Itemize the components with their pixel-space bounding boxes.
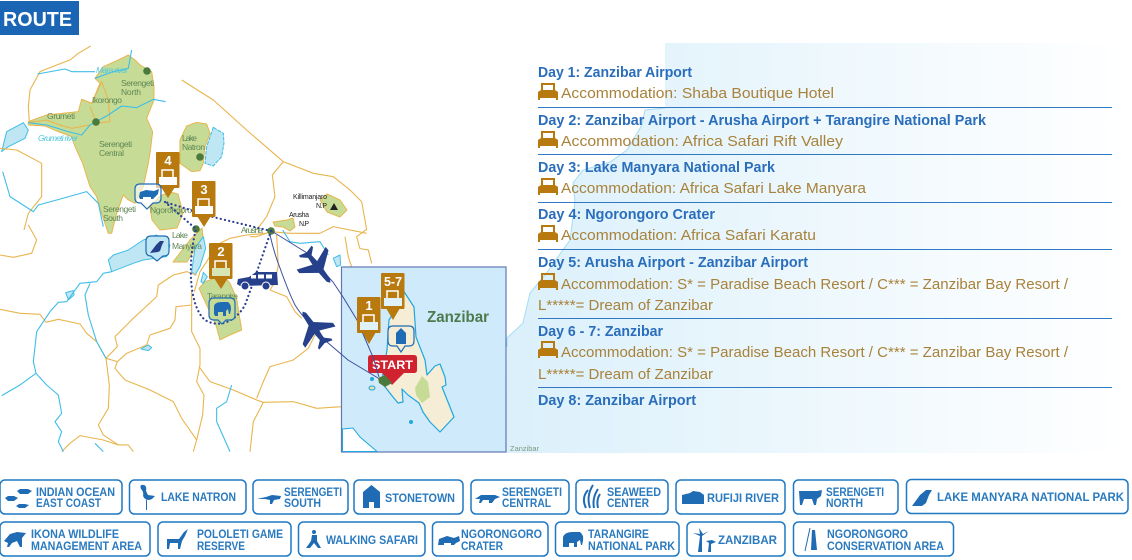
legend: Lake Natron xyxy=(130,480,246,514)
legend: Tarangire: TARANGIRE xyxy=(588,529,649,541)
plane 1 xyxy=(291,239,345,294)
map labels: Mara river xyxy=(96,65,129,75)
day 3: Accommodation: Africa Safari Lake Manyara xyxy=(561,181,867,197)
day 1 xyxy=(538,65,834,102)
callout: START xyxy=(368,355,417,385)
legend: Seaweed Center: CENTER xyxy=(607,498,650,510)
legend: Pololeti xyxy=(158,522,291,556)
pin: day 1 xyxy=(357,297,380,344)
map labels: Serengeti xyxy=(121,78,154,88)
location dots xyxy=(92,67,275,235)
callout: START: START xyxy=(372,358,414,372)
coastline xyxy=(507,108,665,347)
pin: day 2: 2 xyxy=(217,244,225,259)
legend: Indian Ocean East Coast xyxy=(0,480,122,514)
day 5: Accommodation: S* = Paradise Beach Resort / C*** = Zanzibar Bay Resort / xyxy=(561,277,1069,293)
Zanzibar Town xyxy=(378,375,392,387)
callout: elephant xyxy=(209,298,235,324)
legend: Stonetown xyxy=(354,480,463,514)
itinerary xyxy=(538,65,1069,409)
legend: Ngorongoro Crater: CRATER xyxy=(461,541,504,553)
legend: Ngorongoro Crater xyxy=(432,522,548,556)
day 6-7 xyxy=(538,324,1069,383)
title: ROUTE xyxy=(3,9,72,31)
dotted driving route xyxy=(165,202,271,324)
map labels: Central xyxy=(99,148,124,158)
pin: days 5-7: 5-7 xyxy=(384,275,402,289)
legend: Pololeti: POLOLETI GAME xyxy=(197,529,283,541)
day 2: Day 2: Zanzibar Airport - Arusha Airport + Tarangire National Park xyxy=(538,113,987,129)
legend: Serengeti South xyxy=(253,480,348,514)
forest area xyxy=(415,376,430,403)
pin: day 1: 1 xyxy=(365,298,373,313)
day 2 xyxy=(538,113,987,150)
pin: day 3: 3 xyxy=(200,182,208,197)
legend: Lake Manyara National Park: LAKE MANYARA NATIONAL PARK xyxy=(937,492,1125,504)
legend: Serengeti North: SERENGETI xyxy=(826,487,884,499)
flight routes xyxy=(270,231,379,378)
icon: safari jeep xyxy=(237,272,278,290)
title xyxy=(0,1,79,35)
map labels: Lake xyxy=(172,230,188,240)
legend: Serengeti Central: SERENGETI xyxy=(502,487,562,499)
map labels: Ikorongo xyxy=(92,95,122,105)
map: northern Tanzania: Killimanjaro xyxy=(293,194,327,201)
pin: day 3 xyxy=(192,181,216,227)
map: northern Tanzania: N.P xyxy=(316,203,327,210)
legend: Lake Natron: LAKE NATRON xyxy=(161,492,236,504)
map labels: Grumeti river xyxy=(38,133,79,143)
legend: Ikona: IKONA WILDLIFE xyxy=(31,529,119,541)
mainland corner in inset xyxy=(342,428,377,452)
legend: Pololeti: RESERVE xyxy=(197,541,245,553)
legend: Walking Safari: WALKING SAFARI xyxy=(326,535,418,547)
day 6-7: Accommodation: S* = Paradise Beach Resort / C*** = Zanzibar Bay Resort / xyxy=(561,345,1069,361)
map labels: Ngorongoro xyxy=(150,205,192,215)
legend: Indian Ocean East Coast: INDIAN OCEAN xyxy=(36,487,115,499)
legend: Serengeti North xyxy=(794,480,898,514)
map labels: Manyara xyxy=(172,241,202,251)
roads xyxy=(0,46,372,267)
map labels: Tarangire xyxy=(207,291,238,301)
day 8: Day 8: Zanzibar Airport xyxy=(538,393,696,409)
callout: stonetown xyxy=(388,326,414,352)
map labels: Arusha xyxy=(241,225,263,235)
inset label: Zanzibar xyxy=(427,309,489,326)
legend: Zanzibar xyxy=(687,522,785,556)
legend: Ngorongoro Conservation Area xyxy=(794,522,954,556)
day 3 xyxy=(538,160,867,197)
day 6-7: Day 6 - 7: Zanzibar xyxy=(538,324,663,340)
map: northern Tanzania: Arusha xyxy=(289,212,309,219)
legend: Ngorongoro Conservation Area: CONSERVATION AREA xyxy=(827,541,944,553)
legend: Ikona: MANAGEMENT AREA xyxy=(31,541,142,553)
map: northern Tanzania: N.P xyxy=(299,221,309,228)
lakes xyxy=(2,123,341,351)
legend: Serengeti North: NORTH xyxy=(826,498,863,510)
legend: Tarangire: NATIONAL PARK xyxy=(588,541,676,553)
day 3: Day 3: Lake Manyara National Park xyxy=(538,160,776,176)
day 1: Day 1: Zanzibar Airport xyxy=(538,65,692,81)
legend: Tarangire xyxy=(556,522,679,556)
legend: Ikona xyxy=(0,522,150,556)
legend: Ngorongoro Conservation Area: NGORONGORO xyxy=(827,529,908,541)
day 4: Accommodation: Africa Safari Karatu xyxy=(561,228,816,244)
legend: Lake Manyara National Park xyxy=(906,480,1128,514)
legend: Walking Safari xyxy=(298,522,425,556)
islets xyxy=(369,378,412,424)
small Zanzibar label: Zanzibar xyxy=(510,444,540,453)
legend: Serengeti Central xyxy=(471,480,569,514)
day 5: Day 5: Arusha Airport - Zanzibar Airport xyxy=(538,255,808,271)
pin: day 4 xyxy=(156,152,180,198)
plane 2 xyxy=(287,301,341,356)
legend: Serengeti South: SOUTH xyxy=(284,498,321,510)
map labels xyxy=(38,65,263,301)
legend: Rufiji River xyxy=(676,480,785,514)
map labels: Serengeti xyxy=(99,139,132,149)
map labels: North xyxy=(121,87,141,97)
day 1: Accommodation: Shaba Boutique Hotel xyxy=(561,86,834,102)
map labels: South xyxy=(103,213,123,223)
legend: Serengeti Central: CENTRAL xyxy=(502,498,551,510)
day 2: Accommodation: Africa Safari Rift Valley xyxy=(561,134,844,150)
day 4 xyxy=(538,207,816,244)
map labels: Grumeti xyxy=(47,111,75,121)
legend: Indian Ocean East Coast: EAST COAST xyxy=(36,498,101,510)
ocean background xyxy=(506,43,1132,453)
map: northern Tanzania xyxy=(0,46,372,452)
day 6-7: L*****= Dream of Zanzibar xyxy=(538,367,713,383)
callout: bird xyxy=(146,236,169,261)
Zanzibar island xyxy=(382,290,454,432)
legend: Seaweed Center: SEAWEED xyxy=(607,487,661,499)
day 5 xyxy=(538,255,1069,314)
icon: Kilimanjaro peak xyxy=(330,203,338,210)
legend: Stonetown: STONETOWN xyxy=(385,493,455,505)
legend: Ngorongoro Crater: NGORONGORO xyxy=(461,529,542,541)
legend: Rufiji River: RUFIJI RIVER xyxy=(707,493,780,505)
map labels: Serengeti xyxy=(103,204,136,214)
map labels: Lake xyxy=(182,133,197,143)
pin: day 2 xyxy=(209,243,232,289)
callout: rhino xyxy=(135,184,161,209)
legend xyxy=(0,480,1128,556)
pin: days 5-7 xyxy=(381,273,404,320)
pin: day 4: 4 xyxy=(164,153,172,168)
rivers xyxy=(3,50,166,227)
day 4: Day 4: Ngorongoro Crater xyxy=(538,207,715,223)
national park areas xyxy=(28,55,347,340)
map labels: Natron xyxy=(182,142,205,152)
inset map: Zanzibar xyxy=(342,267,506,452)
legend: Serengeti South: SERENGETI xyxy=(284,487,342,499)
legend: Zanzibar: ZANZIBAR xyxy=(718,535,778,547)
day 5: L*****= Dream of Zanzibar xyxy=(538,298,713,314)
legend: Seaweed Center xyxy=(576,480,668,514)
